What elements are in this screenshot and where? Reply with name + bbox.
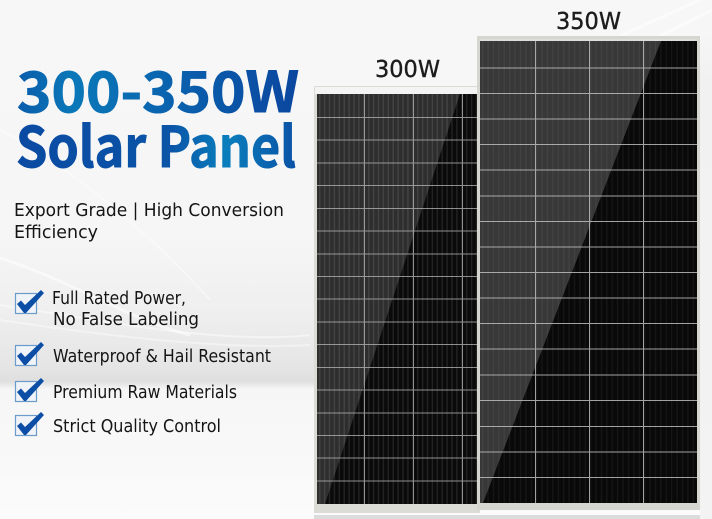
feature: waterproof: Waterproof & Hail Resistant <box>53 347 271 367</box>
title: 300-350W <box>17 48 299 129</box>
subtitle <box>14 200 284 243</box>
panel: 350W <box>477 36 700 510</box>
feature: raw materials: Premium Raw Materials <box>53 383 237 403</box>
feature: raw materials <box>16 378 237 403</box>
feature: full rated power: No False Labeling <box>53 310 199 330</box>
panel reflection <box>314 515 700 519</box>
feature: quality control <box>16 412 221 437</box>
label: 350W: 350W <box>556 7 621 35</box>
feature: full rated power <box>16 289 199 330</box>
feature list <box>16 289 271 437</box>
label: 300W: 300W <box>375 55 440 83</box>
title: Solar Panel <box>16 103 296 184</box>
title <box>16 48 299 184</box>
feature: quality control: Strict Quality Control <box>53 417 221 437</box>
feature: full rated power: Full Rated Power, <box>52 289 186 309</box>
panel: 300W <box>314 86 480 513</box>
feature: waterproof <box>16 342 271 367</box>
subtitle: Efficiency <box>14 222 98 243</box>
subtitle: Export Grade | High Conversion <box>14 200 284 221</box>
